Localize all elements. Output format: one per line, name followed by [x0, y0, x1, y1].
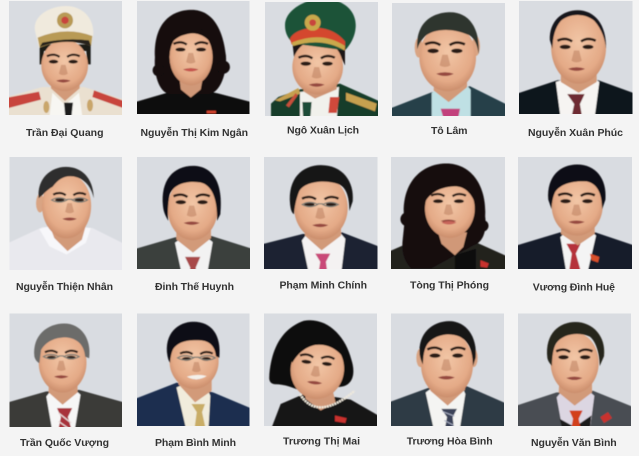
- name: Trương Hòa Bình: [407, 435, 493, 447]
- panel: Trương Hòa Bình: [384, 314, 511, 447]
- name: Nguyễn Thiện Nhân: [16, 280, 113, 293]
- name: Trần Đại Quang: [26, 127, 104, 139]
- portrait: man with dark suit and pink tie: [392, 3, 505, 116]
- portrait: officer in white uniform and cap: [9, 1, 122, 115]
- name: Nguyễn Văn Bình: [531, 436, 617, 449]
- portrait: man in navy suit, red tie and flag pin: [518, 157, 632, 269]
- portrait: smiling man with glasses and gold tie: [137, 314, 250, 426]
- portrait: man in grey suit, orange tie and flag pin: [518, 314, 631, 426]
- portrait: woman in black ao dai: [137, 1, 250, 114]
- name: Ngô Xuân Lịch: [287, 124, 359, 136]
- panel: Phạm Bình Minh: [130, 314, 256, 449]
- panel: Nguyễn Xuân Phúc: [512, 1, 639, 139]
- panel: Đinh Thế Huynh: [130, 157, 257, 293]
- panel: Nguyễn Văn Bình: [511, 314, 638, 449]
- portrait: man with glasses in white shirt: [10, 157, 122, 270]
- name: Nguyễn Thị Kim Ngân: [140, 126, 248, 139]
- panel: Trần Đại Quang: [2, 1, 129, 139]
- name: Vương Đình Huệ: [533, 282, 615, 294]
- name: Phạm Minh Chính: [280, 280, 367, 292]
- panel: Vương Đình Huệ: [511, 157, 639, 294]
- portrait: woman with curly hair and dark jacket: [391, 157, 505, 269]
- panel: Tòng Thị Phóng: [384, 157, 512, 292]
- name: Đinh Thế Huynh: [155, 281, 234, 293]
- portrait: officer in green uniform and cap: [265, 2, 378, 116]
- name: Trần Quốc Vượng: [20, 437, 109, 449]
- panel: Ngô Xuân Lịch: [265, 0, 385, 136]
- portrait: woman with short dark hair and pearl necklace: [264, 314, 377, 426]
- name: Nguyễn Xuân Phúc: [528, 126, 623, 139]
- portrait: man in dark grey suit and red tie: [137, 157, 250, 269]
- portrait: man in dark suit and navy striped tie: [391, 314, 504, 426]
- panel: Trần Quốc Vượng: [3, 314, 129, 449]
- portrait: balding man in dark suit and maroon tie: [519, 1, 632, 114]
- portrait: man with glasses, navy suit and pink tie: [264, 157, 378, 269]
- name: Tòng Thị Phóng: [410, 280, 489, 292]
- portrait: grey-haired man with glasses and striped red tie: [10, 314, 122, 427]
- name: Trương Thị Mai: [283, 435, 360, 447]
- panel: Phạm Minh Chính: [257, 157, 385, 292]
- panel: Trương Thị Mai: [264, 314, 384, 447]
- panel: Nguyễn Thiện Nhân: [3, 157, 129, 293]
- name: Phạm Bình Minh: [155, 437, 236, 449]
- name: Tô Lâm: [431, 125, 468, 137]
- panel: Nguyễn Thị Kim Ngân: [130, 1, 256, 139]
- panel: Tô Lâm: [385, 3, 512, 137]
